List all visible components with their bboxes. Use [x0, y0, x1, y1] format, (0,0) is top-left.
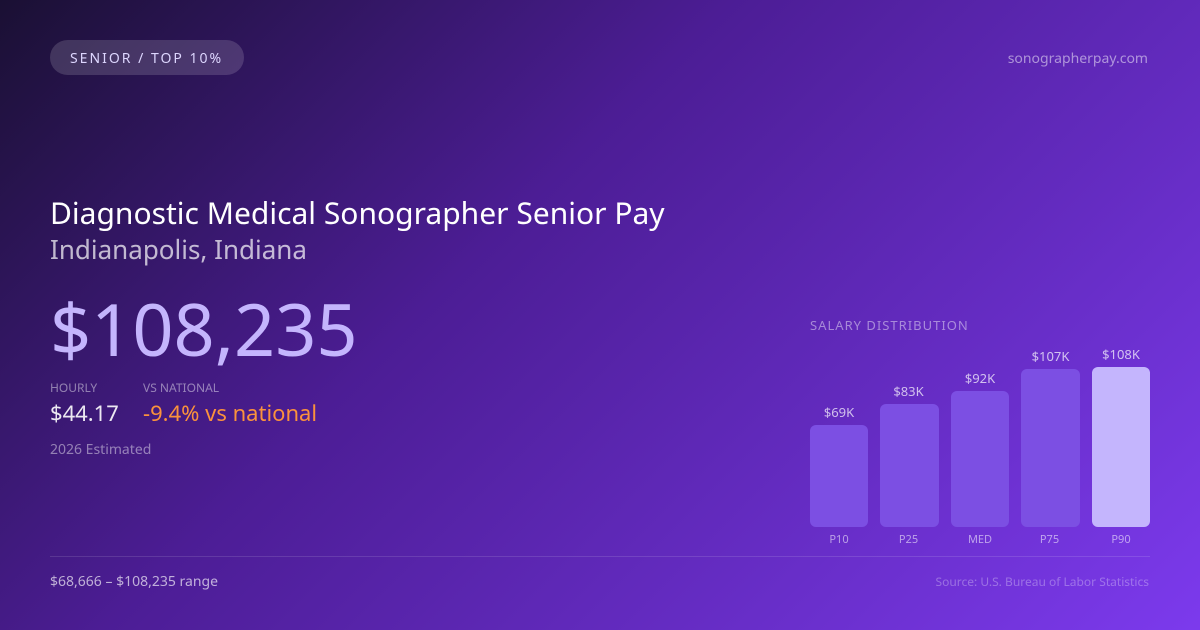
site name: sonographerpay.com — [1008, 49, 1148, 68]
bar P25: P25 — [899, 532, 918, 547]
hourly value: $44.17 — [50, 398, 119, 428]
bar P90: P90 — [1111, 532, 1131, 547]
bar P75: P75 — [1040, 532, 1059, 547]
stat: hourly — [50, 379, 119, 428]
chart heading: SALARY DISTRIBUTION — [810, 316, 969, 334]
bar chart — [810, 345, 1150, 547]
hourly label: HOURLY — [50, 379, 97, 396]
badge: senior / top 10%: SENIOR / TOP 10% — [70, 49, 223, 68]
bar P90 — [1092, 345, 1150, 547]
title: Diagnostic Medical Sonographer Senior Pay — [50, 192, 665, 233]
year note: 2026 Estimated — [50, 440, 151, 459]
badge: senior / top 10% — [50, 40, 244, 75]
bar P75: $107K — [1032, 347, 1069, 365]
bar P25 — [880, 382, 939, 547]
bar P10 — [810, 403, 868, 547]
stat: vs national — [143, 379, 317, 428]
bar P10: $69K — [824, 403, 854, 421]
vs national label: VS NATIONAL — [143, 379, 219, 396]
vs national value: -9.4% vs national — [143, 398, 317, 428]
headline salary: $108,235 — [50, 280, 358, 378]
bar P75 — [1021, 347, 1080, 547]
bar P10: P10 — [829, 532, 849, 547]
bar P25: $83K — [893, 382, 924, 400]
location subtitle: Indianapolis, Indiana — [50, 231, 307, 267]
source note: Source: U.S. Bureau of Labor Statistics — [936, 573, 1149, 590]
bar median: $92K — [965, 369, 995, 387]
bar median: MED — [968, 532, 992, 547]
bar P90: $108K — [1102, 345, 1140, 363]
bar median — [951, 369, 1009, 547]
salary range: $68,666 – $108,235 range — [50, 572, 218, 591]
